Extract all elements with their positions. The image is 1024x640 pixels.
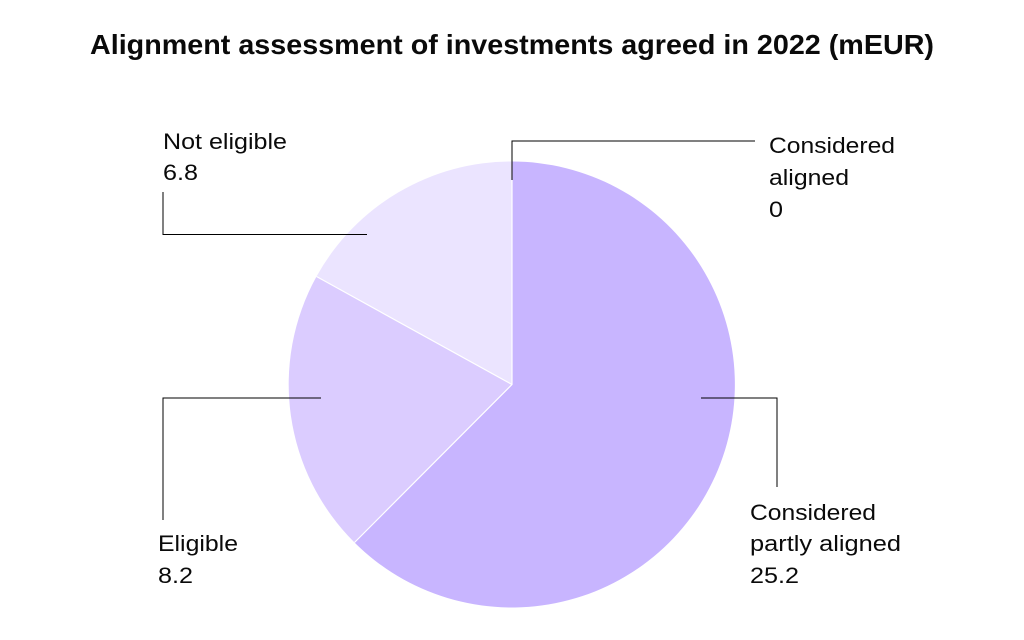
label: considered partly aligned: partly aligned (750, 531, 901, 556)
slice: considered partly aligned (354, 162, 735, 608)
leader line: considered aligned (512, 141, 755, 180)
label: considered partly aligned: 25.2 (750, 563, 799, 588)
label: eligible: Eligible (158, 531, 238, 556)
label: not eligible: 6.8 (163, 160, 198, 185)
pie chart (289, 161, 735, 608)
leader line: not eligible (163, 192, 367, 234)
title: Alignment assessment of investments agreed in 2022 (mEUR) (90, 29, 934, 60)
label: considered partly aligned (750, 500, 901, 588)
label: considered aligned: 0 (769, 197, 783, 222)
leader line: considered partly aligned (701, 398, 777, 487)
label: considered aligned: Considered (769, 133, 895, 158)
slice: eligible (289, 276, 512, 542)
slice dividers (316, 162, 512, 542)
label: not eligible (163, 129, 287, 185)
label: considered aligned (769, 133, 895, 222)
label: eligible (158, 531, 238, 588)
label: not eligible: Not eligible (163, 129, 287, 154)
label: considered aligned: aligned (769, 165, 849, 190)
label: eligible: 8.2 (158, 563, 193, 588)
label: considered partly aligned: Considered (750, 500, 876, 525)
leader line: eligible (163, 398, 321, 520)
slice: not eligible (316, 161, 512, 384)
